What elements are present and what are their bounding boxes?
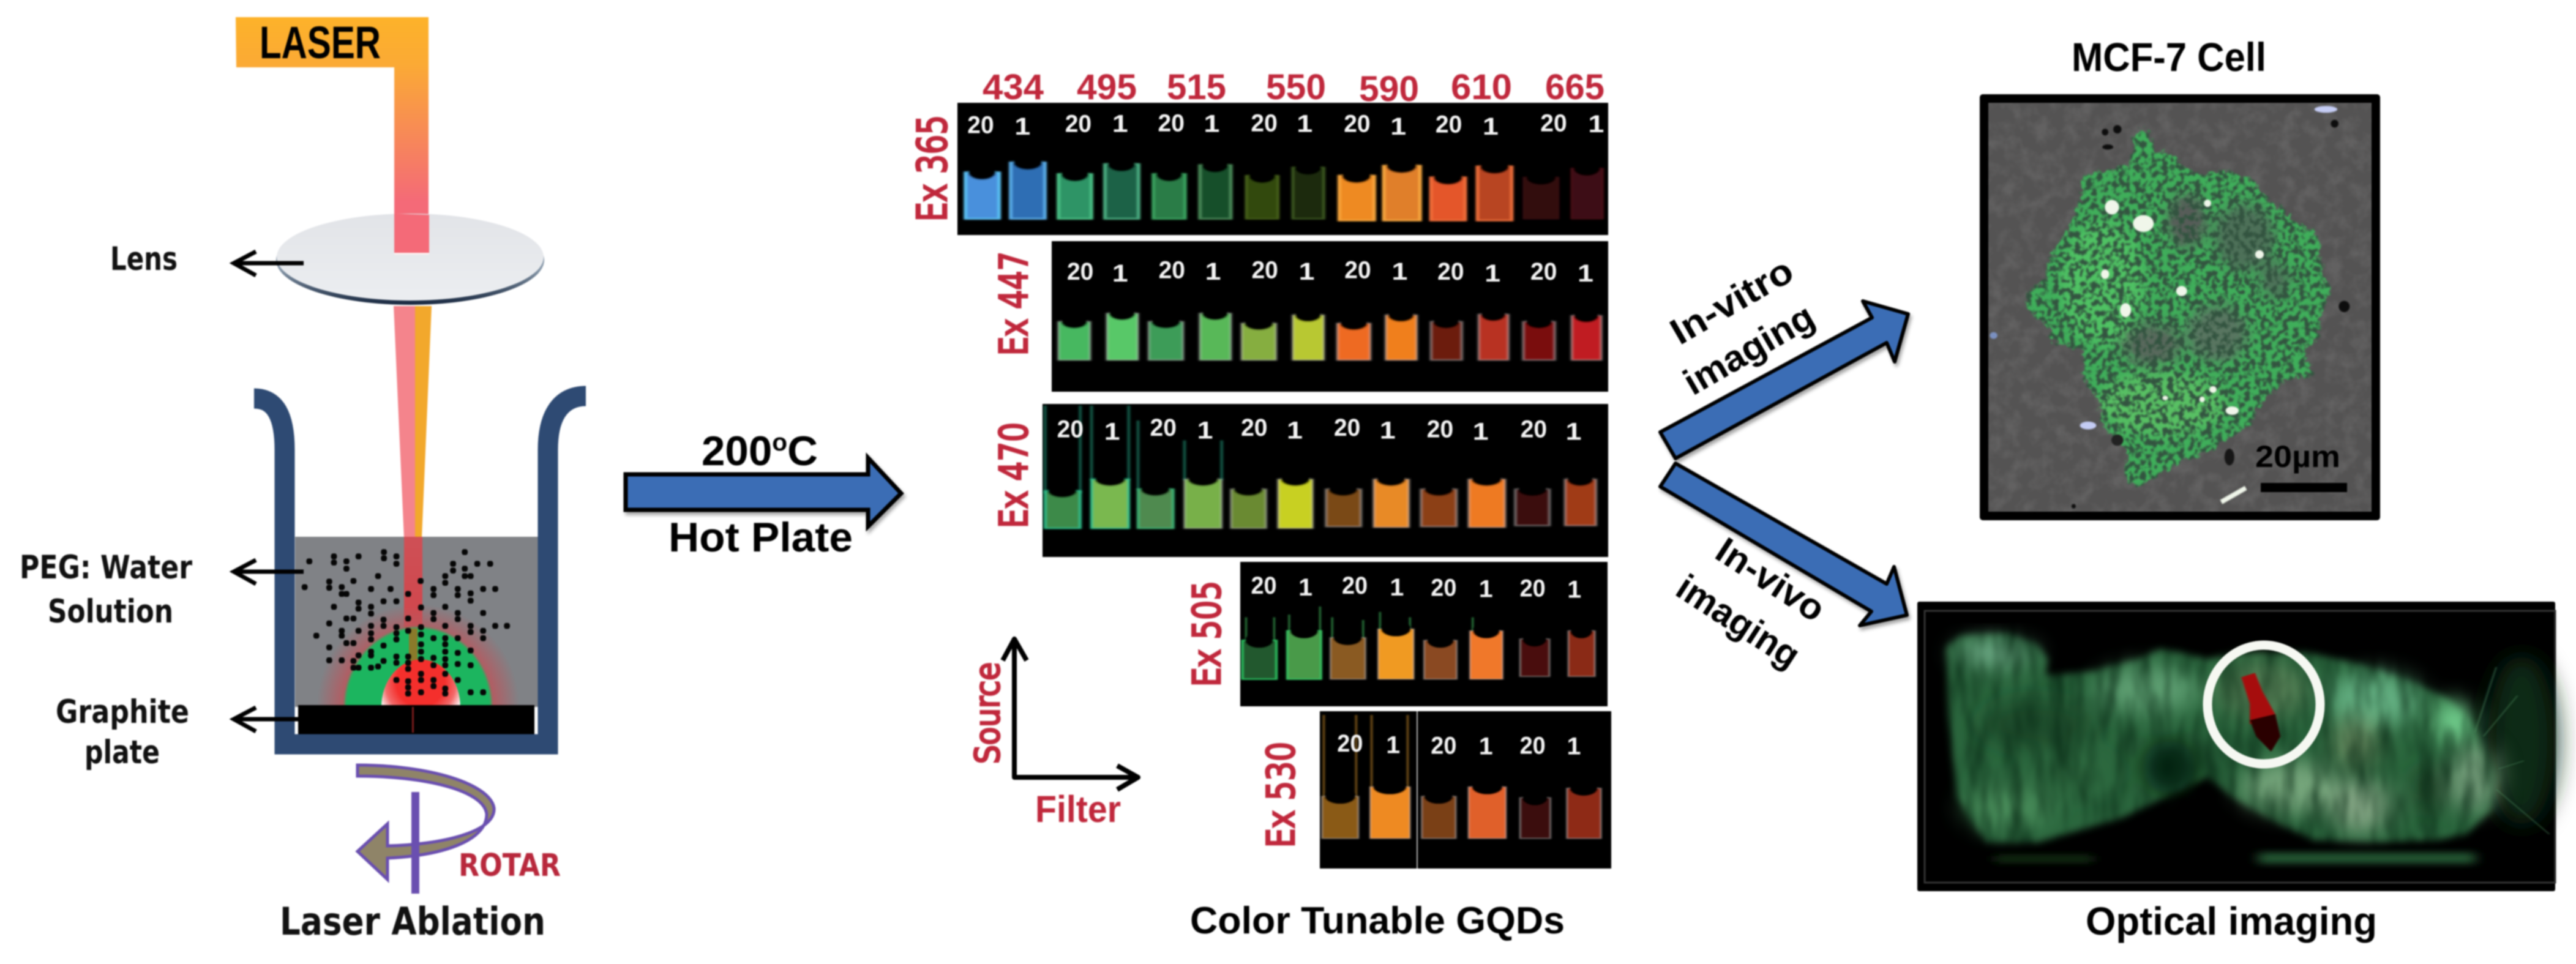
- floor reflection: [1995, 853, 2475, 864]
- heading: Optical imaging: Optical imaging: [2086, 899, 2377, 943]
- panel: Ex 365 cuvettes: 1: [1112, 110, 1128, 137]
- label: PEG Water Solution: [20, 549, 192, 630]
- mouse: [1946, 633, 2556, 864]
- label: 20 µm: 20µm: [2255, 439, 2340, 474]
- panel: Ex 365 cuvettes: 1: [1390, 113, 1406, 140]
- filter wavelength labels: 515: [1167, 67, 1226, 107]
- label: Graphite plate: [56, 693, 189, 771]
- arrow: hot plate: [626, 458, 901, 526]
- panel: Ex 365 cuvettes: 1: [1297, 110, 1312, 137]
- label: LASER: LASER: [260, 17, 381, 68]
- panel: Ex 505 cuvettes: [1240, 562, 1608, 706]
- panel: Ex 505 cuvettes: 1: [1567, 575, 1581, 603]
- panel: Ex 505 cuvettes: 20: [1342, 572, 1368, 599]
- panel: Ex 470 cuvettes: 1: [1287, 417, 1303, 444]
- label: In-vivo imaging: In-vivo: [1709, 529, 1833, 630]
- panel: Ex 505 cuvettes: 20: [1431, 574, 1456, 601]
- axis arrows: source and filter: [1003, 639, 1138, 790]
- label: Ex 365: Ex 365: [908, 115, 956, 222]
- filter wavelength labels: 550: [1266, 67, 1326, 107]
- label: Ex 447: Ex 447: [992, 252, 1036, 356]
- panel: Ex 365 cuvettes: 1: [1483, 113, 1499, 140]
- red tumor signal: [2241, 673, 2280, 752]
- panel: Ex 447 cuvettes: 1: [1485, 260, 1500, 287]
- panel: Ex 447 cuvettes: 1: [1578, 260, 1593, 287]
- laser beam head: [236, 17, 429, 253]
- green cell body: [1990, 106, 2349, 509]
- beaker: [254, 396, 586, 744]
- label: PEG Water Solution: PEG: Water: [20, 549, 192, 586]
- panel: Ex 530 cuvettes: 1: [1567, 732, 1581, 760]
- panel: Ex 530 cuvettes: 1: [1386, 731, 1400, 758]
- panel: Ex 470 cuvettes: [1043, 404, 1608, 557]
- label: 200 oC: o: [772, 429, 787, 456]
- panel: Ex 365 cuvettes: 20: [1436, 111, 1462, 138]
- heading: Color Tunable GQDs: Color Tunable GQDs: [1190, 900, 1565, 942]
- panel: Ex 447 cuvettes: 20: [1344, 256, 1371, 283]
- laser plasma plume: [321, 536, 515, 706]
- heading: MCF-7 Cell: MCF-7 Cell: [2072, 34, 2266, 80]
- label: Ex 530: Ex 530: [1259, 742, 1303, 848]
- panel: Ex 447 cuvettes: 1: [1112, 260, 1128, 287]
- scale bar: [2261, 483, 2347, 492]
- label: Source: Source: [968, 662, 1007, 764]
- label: In-vitro imaging: imaging: [1676, 296, 1821, 403]
- panel: Ex 365 cuvettes: 20: [1540, 110, 1567, 136]
- label: In-vivo imaging: imaging: [1669, 566, 1808, 676]
- rotor arrow: [358, 765, 494, 894]
- panel: Ex 447 cuvettes: 20: [1159, 256, 1185, 283]
- label: Ex 505: Ex 505: [1185, 581, 1229, 687]
- label: ROTAR: ROTAR: [459, 848, 561, 884]
- panel: Ex 470 cuvettes: 1: [1473, 418, 1489, 445]
- arrow: graphite plate: [234, 708, 299, 731]
- panel: Ex 447 cuvettes: 1: [1205, 258, 1221, 285]
- filter wavelength labels: 495: [1077, 67, 1137, 107]
- arrow: in-vivo: [1660, 463, 1907, 626]
- filter wavelength labels: 665: [1545, 67, 1604, 107]
- panel: Ex 505 cuvettes: 1: [1479, 575, 1493, 602]
- panel: laser ablation setup: [20, 17, 586, 944]
- label: Lens: Lens: [110, 241, 178, 278]
- label: Filter: Filter: [1035, 788, 1121, 830]
- dark debris: [2072, 120, 2349, 509]
- panel: Ex 447 cuvettes: 1: [1298, 258, 1315, 285]
- panel: Ex 470 cuvettes: 20: [1241, 414, 1268, 441]
- panel: in-vivo optical imaging of mouse: [1917, 602, 2556, 891]
- label: In-vitro imaging: In-vitro: [1663, 250, 1800, 353]
- whiskers: [2475, 667, 2549, 834]
- arrow: solution: [234, 560, 304, 584]
- panel: Ex 530 cuvettes: 20: [1431, 731, 1456, 759]
- panel: Ex 470 cuvettes: 1: [1104, 418, 1120, 445]
- panel: Ex 505 cuvettes: 1: [1390, 574, 1404, 601]
- bright spots: [2101, 200, 2264, 502]
- label: 200 oC: 200: [702, 428, 771, 474]
- panel: Ex 470 cuvettes: 1: [1380, 417, 1396, 444]
- panel: Ex 530 cuvettes: 20: [1520, 731, 1546, 759]
- panel: Ex 470 cuvettes: 20: [1334, 414, 1360, 441]
- panel: Ex 365 cuvettes: 20: [1158, 110, 1185, 136]
- panel: Ex 365 cuvettes: 20: [1065, 110, 1091, 137]
- label: Graphite plate: plate: [84, 734, 160, 771]
- focused beam above liquid: [394, 306, 432, 538]
- panel: Ex 505 cuvettes: 20: [1251, 572, 1277, 599]
- label: In-vitro imaging: [1663, 250, 1821, 403]
- label: Hot Plate: Hot Plate: [668, 514, 853, 561]
- panel: Ex 447 cuvettes: [1052, 241, 1608, 392]
- filter wavelength labels: 434: [983, 67, 1044, 107]
- label: Ex 470: Ex 470: [992, 422, 1036, 528]
- panel: Ex 470 cuvettes: 20: [1057, 416, 1084, 443]
- nanoparticle dots: [304, 552, 508, 693]
- panel: Ex 365 cuvettes: 20: [1251, 110, 1278, 136]
- arrow: in-vitro: [1660, 301, 1908, 458]
- panel: Ex 365 cuvettes: 20: [1344, 110, 1371, 137]
- filter wavelength labels: 610: [1451, 67, 1512, 107]
- label: 200 oC: C: [787, 428, 818, 474]
- panel: Ex 365 cuvettes: 20: [967, 111, 994, 139]
- filter wavelength labels: 590: [1359, 69, 1419, 109]
- panel: Ex 447 cuvettes: 20: [1067, 258, 1093, 285]
- graphite plate: [298, 705, 534, 734]
- panel: Ex 365 cuvettes: 1: [1588, 111, 1604, 138]
- highlight circle: [2207, 645, 2320, 764]
- panel: Ex 447 cuvettes: 1: [1391, 258, 1407, 285]
- blue-white debris: [1990, 106, 2337, 430]
- panel: Ex 470 cuvettes: 20: [1427, 416, 1453, 443]
- arrow: lens: [234, 252, 304, 275]
- panel: Ex 447 cuvettes: 20: [1437, 258, 1464, 285]
- panel: Ex 505 cuvettes: 1: [1298, 574, 1312, 601]
- panel: Ex 470 cuvettes: 20: [1150, 414, 1177, 441]
- heading: Laser Ablation: Laser Ablation: [280, 899, 545, 944]
- panel: Ex 530 cuvettes: [1320, 711, 1611, 869]
- panel: MCF-7 cell micrograph: [1980, 94, 2380, 520]
- panel: Ex 530 cuvettes: 20: [1337, 730, 1363, 757]
- panel: Ex 365 cuvettes: [957, 103, 1608, 235]
- label: In-vivo imaging: [1669, 529, 1833, 676]
- panel: Ex 447 cuvettes: 20: [1530, 258, 1557, 285]
- filter wavelength labels: [983, 67, 1604, 109]
- panel: Ex 470 cuvettes: 20: [1521, 416, 1547, 443]
- panel: Ex 505 cuvettes: 20: [1520, 574, 1546, 602]
- liquid: PEG water solution: [295, 537, 538, 707]
- panel: Ex 447 cuvettes: 20: [1251, 256, 1278, 283]
- label: PEG Water Solution: Solution: [48, 593, 173, 630]
- panel: Ex 530 cuvettes: 1: [1479, 732, 1493, 760]
- panel: Ex 470 cuvettes: 1: [1565, 418, 1582, 445]
- lens: [276, 214, 544, 305]
- panel: Ex 365 cuvettes: 1: [1204, 110, 1219, 137]
- panel: Ex 470 cuvettes: 1: [1197, 417, 1213, 444]
- label: Graphite plate: Graphite: [56, 693, 189, 731]
- panel: Ex 365 cuvettes: 1: [1014, 113, 1030, 140]
